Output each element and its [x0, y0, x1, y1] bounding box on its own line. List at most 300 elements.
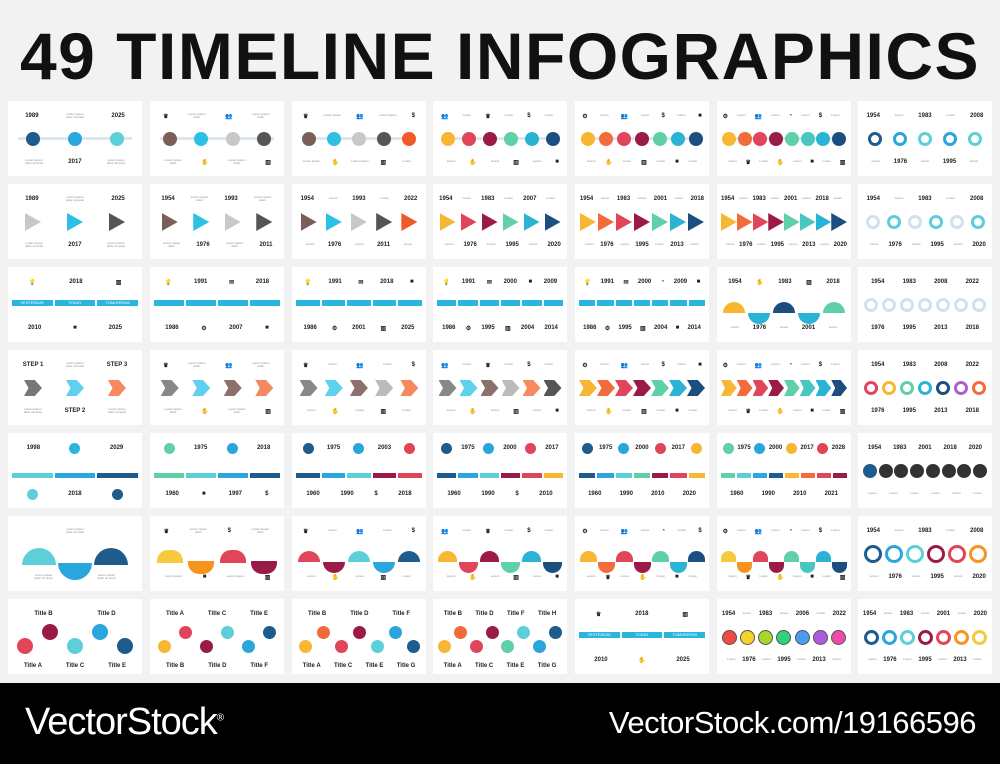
row 1 col 5: Lorem	[657, 159, 665, 163]
row 7 col 5: YESTERDAY	[587, 632, 611, 637]
row 2 col 6: 2013	[802, 242, 816, 248]
row 3 col 7: 1976	[871, 325, 884, 331]
row 2 col 5: Lorem	[675, 196, 683, 200]
row 7 col 6: 1954	[722, 611, 735, 617]
row 4 col 7: 1983	[903, 362, 916, 368]
row 4 col 3: $	[412, 362, 415, 368]
row 6 col 4: ▥	[513, 574, 519, 580]
row 1 col 5: 👥	[621, 114, 628, 120]
row 3 col 5: 2009	[674, 279, 687, 285]
row 1 col 1: Lorem ipsum dolor sit amet	[25, 158, 43, 165]
row 4 col 4: 👥	[441, 362, 449, 368]
row 7 col 7: 2020	[974, 611, 987, 617]
row 3 col 1: YESTERDAY	[20, 300, 44, 305]
row 6 col 2: Lorem ipsum dolor	[252, 526, 269, 534]
row 6 col 3: Lorem	[383, 528, 392, 532]
row 2 col 5: Lorem	[620, 242, 629, 246]
row 5 col 4: 1990	[481, 491, 495, 497]
row 3 col 7: 2018	[966, 325, 979, 331]
row 7 col 5	[575, 599, 709, 674]
row 6 col 6: Lorem	[771, 528, 780, 532]
row 5 col 7: Lorem	[889, 491, 898, 495]
row 3 col 4: 2000	[504, 279, 517, 285]
row 4 col 6: Lorem	[760, 408, 768, 412]
row 4 col 6: Lorem	[737, 362, 746, 366]
row 5 col 5: 2020	[683, 491, 696, 497]
row 7 col 7: Lorem	[938, 657, 947, 661]
row 2 col 3: 2011	[377, 242, 390, 248]
row 3 col 3: ✉	[358, 280, 363, 286]
row 5 col 3: $	[374, 491, 378, 497]
row 3 col 3: ⚙	[332, 326, 337, 332]
row 2 col 6: Lorem	[757, 242, 766, 246]
footer url: VectorStock.com/19166596	[609, 705, 976, 740]
row 6 col 6: ■	[810, 574, 814, 580]
row 1 col 2: ♛	[163, 114, 169, 120]
row 6 col 5: Lorem	[678, 528, 686, 532]
row 5 col 5	[575, 433, 709, 508]
row 7 col 6: Lorem	[762, 657, 771, 661]
row 3 col 4: ✉	[487, 280, 492, 286]
row 2 col 7: 1983	[918, 196, 932, 202]
row 2 col 5: 1995	[635, 242, 649, 248]
row 2 col 7: Lorem	[947, 196, 955, 200]
row 1 col 2: Lorem ipsum dolor	[164, 158, 182, 165]
row 7 col 6: 1983	[759, 611, 772, 617]
row 4 col 5: Lorem	[600, 362, 609, 366]
row 6 col 7: 1983	[918, 528, 932, 534]
row 3 col 3	[292, 267, 426, 342]
row 2 col 3: Lorem	[381, 196, 389, 200]
row 2 col 2: 1976	[196, 242, 210, 248]
row 2 col 1: Lorem ipsum dolor sit amet	[107, 240, 125, 248]
row 7 col 6: 1976	[742, 657, 756, 663]
row 7 col 3: Title C	[334, 663, 352, 669]
row 7 col 7: 1995	[918, 657, 932, 663]
row 1 col 7: Lorem	[970, 159, 978, 163]
row 5 col 4: 2017	[545, 445, 559, 451]
row 1 col 4: Lorem	[545, 113, 553, 117]
row 5 col 7: Lorem	[931, 491, 940, 495]
row 1 col 6: Lorem	[793, 159, 801, 163]
row 6 col 2: Lorem ipsum	[227, 574, 244, 578]
row 5 col 4: $	[515, 491, 519, 497]
row 7 col 5: 2010	[594, 657, 608, 663]
row 6 col 1: Lorem ipsum dolor sit amet	[97, 572, 116, 580]
row 1 col 2: ▥	[265, 160, 271, 166]
row 2 col 3	[292, 184, 426, 259]
row 2 col 3: 2022	[404, 196, 417, 202]
row 1 col 5: Lorem	[600, 113, 609, 117]
row 7 col 4: Title D	[475, 611, 494, 617]
row 3 col 3: 1991	[328, 279, 342, 285]
row 3 col 1	[8, 267, 142, 342]
row 2 col 1: 1989	[25, 196, 39, 202]
row 4 col 1: Lorem ipsum dolor sit amet	[24, 406, 42, 414]
row 6 col 4: Lorem	[545, 528, 553, 532]
row 2 col 1: Lorem ipsum dolor sit amet	[25, 240, 43, 248]
row 7 col 7: 1983	[900, 611, 913, 617]
row 6 col 6: 👥	[755, 528, 762, 534]
row 6 col 7: 2008	[970, 528, 983, 534]
row 1 col 5: Lorem	[623, 159, 631, 163]
row 3 col 1: TOMORROW	[105, 300, 130, 305]
row 6 col 5: Lorem	[600, 528, 609, 532]
row 1 col 7: Lorem	[895, 113, 903, 117]
row 1 col 4: Lorem	[447, 159, 455, 163]
row 7 col 1	[8, 599, 142, 674]
row 7 col 3: Title B	[308, 611, 326, 617]
row 1 col 3: ▥	[380, 160, 386, 166]
row 5 col 3	[292, 433, 426, 508]
row 7 col 5: ✋	[638, 658, 646, 664]
row 5 col 7: 2001	[918, 445, 932, 451]
row 3 col 2: 1986	[165, 325, 179, 331]
row 3 col 5: ▥	[640, 326, 646, 332]
row 3 col 4: ■	[529, 279, 532, 285]
row 5 col 7: 2018	[943, 445, 957, 451]
row 7 col 7	[858, 599, 992, 674]
row 2 col 2	[150, 184, 284, 259]
row 4 col 3: Lorem	[402, 408, 411, 412]
row 7 col 7: Lorem	[884, 611, 892, 615]
row 3 col 5: ⚙	[605, 326, 610, 332]
row 4 col 5	[575, 350, 709, 425]
row 4 col 3: Lorem	[307, 408, 316, 412]
row 2 col 2: Lorem ipsum dolor	[226, 240, 243, 248]
row 1 col 4: Lorem	[505, 113, 513, 117]
row 6 col 7: Lorem	[912, 574, 920, 578]
row 4 col 5: ■	[698, 362, 702, 368]
row 4 col 4	[433, 350, 567, 425]
row 4 col 5: Lorem	[623, 408, 631, 412]
row 7 col 2: Title D	[208, 663, 226, 669]
row 6 col 7: Lorem	[947, 528, 955, 532]
row 3 col 6: ✋	[756, 280, 764, 286]
row 5 col 3: 2003	[378, 445, 391, 451]
row 1 col 5: Lorem	[587, 159, 595, 163]
row 1 col 5: ■	[675, 159, 679, 165]
row 2 col 5: Lorem	[585, 242, 594, 246]
row 7 col 6: Lorem	[743, 611, 751, 615]
row 4 col 3: Lorem	[328, 362, 337, 366]
row 5 col 7: Lorem	[973, 491, 982, 495]
row 6 col 3	[292, 516, 426, 591]
row 3 col 6: 2001	[802, 325, 815, 331]
row 4 col 4: ✋	[469, 408, 477, 414]
row 3 col 3: 💡	[304, 280, 312, 286]
row 2 col 3: 1976	[328, 242, 341, 248]
row 6 col 6	[717, 516, 851, 591]
row 1 col 5: ✋	[605, 160, 613, 166]
row 2 col 4: 1976	[463, 242, 477, 248]
row 6 col 6: $	[819, 528, 822, 534]
row 2 col 6: 2018	[816, 196, 829, 202]
row 2 col 7: 1995	[930, 242, 944, 248]
row 4 col 6: ◔	[789, 362, 792, 368]
row 7 col 4: Title H	[538, 611, 556, 617]
row 1 col 5: ■	[698, 113, 702, 119]
row 6 col 6: ◔	[789, 528, 792, 534]
row 1 col 1: 2025	[111, 113, 125, 119]
row 7 col 3: Title D	[350, 611, 368, 617]
row 2 col 5: Lorem	[638, 196, 646, 200]
row 1 col 7: 1954	[867, 113, 880, 119]
row 1 col 5: Lorem	[677, 113, 686, 117]
row 4 col 4: Lorem	[505, 362, 513, 366]
row 6 col 6: Lorem	[793, 574, 801, 578]
row 3 col 6: 1954	[728, 279, 742, 285]
row 4 col 2: ✋	[201, 408, 209, 414]
row 1 col 3: ✋	[332, 160, 339, 166]
row 4 col 5: ▥	[641, 408, 647, 414]
row 6 col 5: ♛	[605, 574, 611, 580]
row 3 col 6: ▥	[806, 280, 812, 286]
row 5 col 6: 2017	[800, 445, 814, 451]
row 3 col 2: ✉	[229, 280, 234, 286]
row 3 col 4: 2009	[544, 279, 557, 285]
row 3 col 2: 2007	[229, 325, 243, 331]
row 5 col 7	[858, 433, 992, 508]
row 2 col 6: Lorem	[802, 196, 811, 200]
row 4 col 1	[8, 350, 142, 425]
row 5 col 2: $	[265, 491, 268, 497]
row 6 col 2: ♛	[164, 528, 169, 534]
row 6 col 7: 1976	[888, 574, 902, 580]
row 3 col 5: ■	[697, 279, 700, 285]
row 2 col 5	[575, 184, 709, 259]
row 4 col 5: $	[662, 362, 665, 368]
row 4 col 6: ✋	[777, 408, 784, 414]
row 6 col 3: ✋	[332, 574, 339, 580]
row 6 col 6: Lorem	[801, 528, 810, 532]
row 1 col 7: Lorem	[872, 159, 880, 163]
row 7 col 6: Lorem	[832, 657, 841, 661]
row 6 col 1	[8, 516, 142, 591]
row 1 col 4: Lorem	[463, 113, 471, 117]
row 5 col 1: 2029	[110, 445, 123, 451]
row 3 col 4: ▥	[505, 326, 511, 332]
row 1 col 4: $	[527, 113, 531, 119]
row 4 col 6: Lorem	[823, 408, 831, 412]
row 2 col 7: Lorem	[895, 196, 903, 200]
row 4 col 1: Lorem ipsum dolor sit amet	[66, 360, 84, 368]
row 3 col 1: 2018	[69, 279, 83, 285]
row 3 col 1: ■	[73, 325, 77, 331]
row 1 col 4: Lorem	[491, 159, 499, 163]
row 4 col 2: Lorem ipsum dolor	[252, 360, 270, 368]
row 7 col 6: Lorem	[780, 611, 788, 615]
row 7 col 7: Lorem	[921, 611, 929, 615]
row 1 col 5: ⚙	[582, 114, 588, 120]
row 4 col 1: STEP 3	[107, 362, 127, 368]
row 4 col 3: ♛	[303, 362, 308, 368]
row 5 col 6	[717, 433, 851, 508]
row 6 col 6: Lorem	[831, 528, 840, 532]
row 5 col 6: 2028	[832, 445, 845, 451]
row 7 col 5: 2018	[635, 611, 649, 617]
row 2 col 2: 2011	[259, 242, 272, 248]
row 2 col 1: 2017	[68, 242, 82, 248]
row 4 col 2	[150, 350, 284, 425]
row 5 col 2: 2018	[257, 445, 270, 451]
row 2 col 6: 1995	[771, 242, 784, 248]
row 2 col 6: Lorem	[789, 242, 797, 246]
row 4 col 2: Lorem ipsum dolor	[188, 360, 205, 368]
row 2 col 6: 1983	[752, 196, 766, 202]
row 4 col 6	[717, 350, 851, 425]
row 6 col 3: ♛	[303, 528, 308, 534]
row 3 col 4: 2004	[521, 325, 534, 331]
row 3 col 7: 2013	[934, 325, 947, 331]
row 5 col 5: 2010	[651, 491, 664, 497]
row 7 col 2	[150, 599, 284, 674]
title: 49 TIMELINE INFOGRAPHICS	[20, 19, 980, 93]
row 2 col 7: 1954	[867, 196, 880, 202]
row 6 col 6: ⚙	[723, 528, 728, 534]
row 1 col 6	[717, 101, 851, 176]
row 4 col 7: 2013	[934, 408, 947, 414]
row 2 col 4: Lorem	[505, 196, 513, 200]
row 3 col 3: ▥	[380, 326, 386, 332]
row 7 col 6: 2022	[833, 611, 846, 617]
row 1 col 6: ✋	[777, 160, 784, 166]
row 4 col 5: Lorem	[689, 408, 697, 412]
row 3 col 6: 1976	[753, 325, 766, 331]
row 3 col 3: 2001	[352, 325, 366, 331]
row 2 col 4: 1983	[481, 196, 494, 202]
row 1 col 4: Lorem	[533, 159, 541, 163]
row 2 col 3: Lorem	[329, 196, 337, 200]
row 3 col 6: 1983	[778, 279, 792, 285]
row 5 col 5: 2000	[635, 445, 649, 451]
row 3 col 7: 2022	[966, 279, 979, 285]
row 3 col 1: TODAY	[68, 300, 82, 305]
row 3 col 1: 💡	[29, 280, 36, 286]
row 3 col 2	[150, 267, 284, 342]
row 3 col 5: 2004	[654, 325, 667, 331]
row 2 col 5: 1983	[617, 196, 630, 202]
row 6 col 5: ⚙	[582, 528, 588, 534]
row 4 col 7: 2022	[966, 362, 979, 368]
row 5 col 5: 1975	[599, 445, 612, 451]
row 3 col 4: 💡	[443, 280, 450, 286]
row 5 col 7: 2020	[969, 445, 982, 451]
row 7 col 5: ▥	[682, 612, 688, 618]
row 3 col 7	[858, 267, 992, 342]
row 7 col 6: 1995	[777, 657, 791, 663]
row 4 col 4: Lorem	[463, 362, 471, 366]
row 4 col 4: ▥	[513, 408, 519, 414]
row 3 col 2: ⚙	[201, 326, 207, 332]
row 6 col 5: ■	[675, 574, 679, 580]
row 3 col 4: 2014	[545, 325, 558, 331]
row 2 col 4: 1954	[439, 196, 453, 202]
row 1 col 2: Lorem ipsum dolor	[188, 112, 205, 119]
row 5 col 1: 2018	[68, 491, 82, 497]
row 6 col 3: ▥	[380, 574, 386, 580]
row 1 col 6: ◔	[789, 113, 792, 119]
row 3 col 4: 1986	[442, 325, 455, 331]
row 1 col 6: Lorem	[801, 113, 810, 117]
row 4 col 4: Lorem	[447, 408, 455, 412]
row 1 col 1: Lorem ipsum dolor sit amet	[107, 158, 125, 165]
row 1 col 5: ▥	[641, 160, 647, 166]
row 6 col 3: Lorem	[328, 528, 337, 532]
row 1 col 3: ♛	[303, 114, 308, 120]
row 1 col 3: Lorem ipsum	[379, 113, 396, 117]
row 2 col 5: 2013	[670, 242, 684, 248]
row 6 col 1: Lorem ipsum dolor sit amet	[66, 526, 84, 534]
row 5 col 6: 1975	[737, 445, 751, 451]
row 1 col 3: Lorem ipsum	[351, 159, 369, 163]
row 4 col 1: STEP 1	[23, 362, 43, 368]
row 3 col 7: 1954	[871, 279, 884, 285]
row 4 col 7: 2008	[934, 362, 947, 368]
row 3 col 1: 2010	[28, 325, 41, 331]
row 1 col 6: $	[819, 113, 822, 119]
row 7 col 5: TOMORROW	[672, 632, 697, 637]
row 4 col 1: STEP 2	[65, 408, 85, 414]
row 1 col 5: Lorem	[641, 113, 649, 117]
row 2 col 2: Lorem ipsum dolor	[163, 240, 180, 248]
row 7 col 4	[433, 599, 567, 674]
row 4 col 3: ▥	[380, 408, 386, 414]
row 6 col 7: 1995	[930, 574, 944, 580]
row 3 col 5: ◔	[661, 279, 664, 285]
row 6 col 7: 2020	[972, 574, 986, 580]
row 3 col 1: 2025	[109, 325, 122, 331]
row 6 col 6: ♛	[745, 574, 751, 580]
row 2 col 1	[8, 184, 142, 259]
row 1 col 7: Lorem	[921, 159, 929, 163]
row 3 col 5: 2014	[687, 325, 701, 331]
row 6 col 5: 👥	[621, 528, 628, 534]
row 1 col 3: $	[412, 113, 415, 119]
row 2 col 2: Lorem ipsum dolor	[191, 194, 208, 202]
row 3 col 6: Lorem	[731, 325, 739, 329]
row 4 col 6: Lorem	[831, 362, 840, 366]
row 4 col 5: Lorem	[657, 408, 665, 412]
row 2 col 6: Lorem	[771, 196, 779, 200]
row 3 col 4: ⚙	[466, 326, 471, 332]
row 1 col 6: Lorem	[823, 159, 831, 163]
row 7 col 3: Title E	[366, 663, 383, 669]
row 2 col 5: Lorem	[655, 242, 664, 246]
row 6 col 6: Lorem	[737, 528, 746, 532]
row 7 col 2: Title E	[250, 611, 268, 617]
row 2 col 4: 1995	[505, 242, 519, 248]
row 4 col 7: 1995	[903, 408, 916, 414]
row 1 col 5	[575, 101, 709, 176]
row 5 col 3: 2018	[398, 491, 412, 497]
row 1 col 3	[292, 101, 426, 176]
row 5 col 1	[8, 433, 142, 508]
row 1 col 3: Lorem ipsum	[324, 113, 341, 117]
row 3 col 3: 2025	[401, 325, 414, 331]
row 3 col 5: 1986	[583, 325, 596, 331]
row 3 col 7: 1983	[903, 279, 916, 285]
row 1 col 3: Lorem	[402, 159, 411, 163]
row 1 col 7: 2008	[970, 113, 983, 119]
row 4 col 2: Lorem ipsum dolor	[164, 406, 182, 414]
row 1 col 6: ▥	[840, 160, 845, 166]
row 3 col 6: Lorem	[829, 325, 837, 329]
row 5 col 2	[150, 433, 284, 508]
row 6 col 6: Lorem	[760, 574, 768, 578]
row 2 col 7	[858, 184, 992, 259]
row 6 col 4: Lorem	[533, 574, 541, 578]
